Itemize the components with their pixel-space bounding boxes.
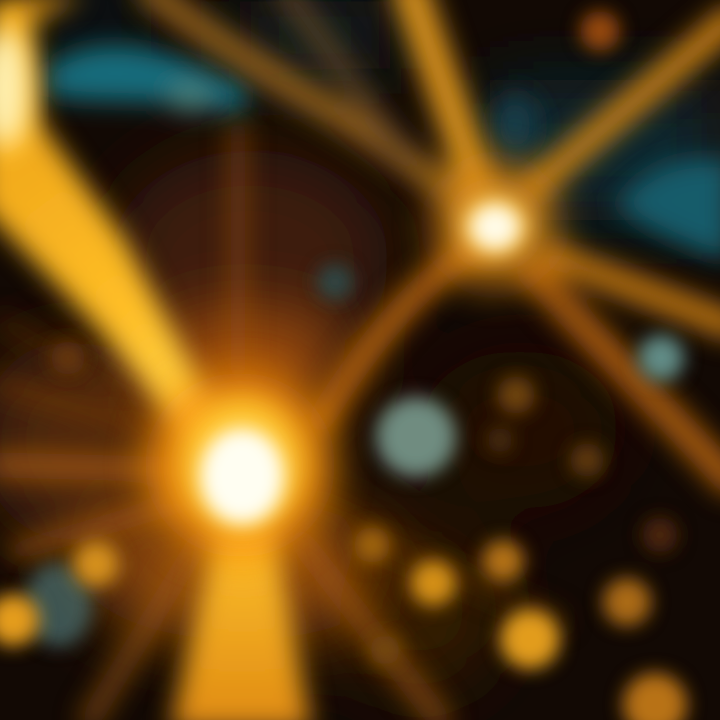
upper right star beams	[150, 0, 720, 480]
upper right star glow	[433, 163, 557, 287]
faint vertical and horizontal rays	[0, 130, 560, 720]
pale orbs	[24, 264, 684, 647]
beam top-left hot spot	[0, 30, 29, 146]
teal patch right	[491, 93, 720, 262]
lower vertical beam	[170, 520, 312, 720]
teal arc upper left	[42, 45, 250, 115]
central star glow	[145, 373, 335, 557]
main diagonal beam	[0, 0, 228, 455]
